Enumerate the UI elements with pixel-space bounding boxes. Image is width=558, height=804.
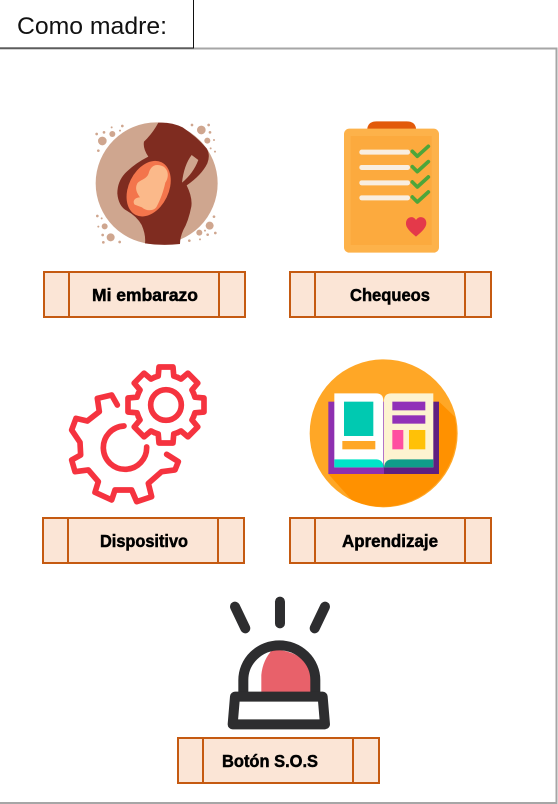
button: Botón S.O.S bbox=[178, 738, 379, 783]
button: Chequeos bbox=[290, 272, 491, 317]
icon: gears bbox=[72, 367, 204, 502]
title tab: Como madre bbox=[0, 0, 194, 48]
icon: emergency siren bbox=[233, 602, 325, 724]
button: Mi embarazo bbox=[44, 272, 245, 317]
title tab: Como madre: Como madre: bbox=[17, 13, 167, 40]
button: Chequeos: Chequeos bbox=[350, 285, 430, 305]
icon: open book bbox=[310, 359, 458, 507]
icon: pregnant woman bbox=[95, 122, 218, 245]
button: Dispositivo: Dispositivo bbox=[100, 531, 188, 551]
button: Aprendizaje: Aprendizaje bbox=[342, 531, 438, 551]
button: Mi embarazo: Mi embarazo bbox=[92, 285, 198, 305]
button: Botón S.O.S: Botón S.O.S bbox=[222, 751, 318, 771]
icon: clipboard checklist bbox=[344, 121, 439, 253]
button: Aprendizaje bbox=[290, 518, 491, 563]
button: Dispositivo bbox=[43, 518, 244, 563]
